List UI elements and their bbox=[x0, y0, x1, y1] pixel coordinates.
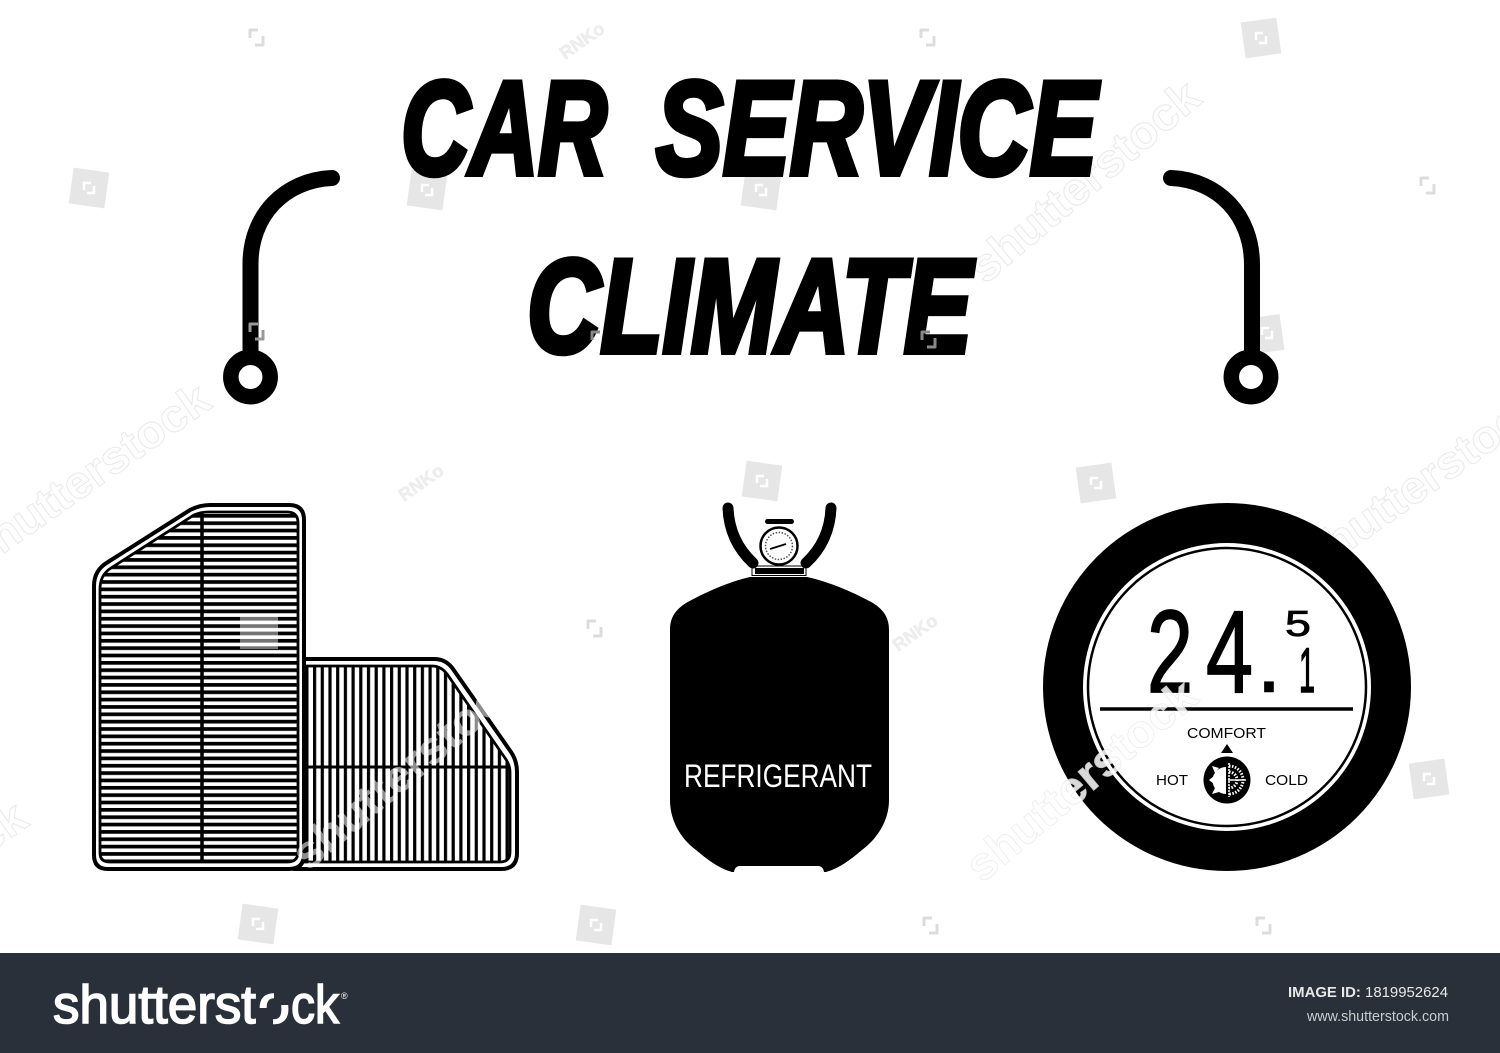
watermark text: shutterstock bbox=[958, 69, 1210, 293]
shutterstock logo: o bbox=[258, 975, 290, 1035]
website: www.shutterstock.com bbox=[1306, 1008, 1449, 1025]
cold label: COLD bbox=[1265, 773, 1308, 789]
valve base plate bbox=[755, 568, 804, 574]
hot label: HOT bbox=[1156, 773, 1188, 789]
icon: refrigerant tank bbox=[670, 508, 889, 872]
temperature readout: 4 bbox=[1206, 586, 1253, 717]
icon: sun and snowflake bbox=[1204, 756, 1250, 804]
tank body bbox=[670, 577, 889, 872]
icon: climate control dial: 1 bbox=[1299, 636, 1315, 706]
title word: car: CAR bbox=[401, 55, 607, 203]
left filter, horizontal pleats bbox=[94, 505, 304, 869]
left bracket bbox=[231, 178, 332, 397]
dial bezel bbox=[1043, 503, 1411, 871]
right filter, vertical pleats bbox=[295, 659, 517, 869]
watermark over filter: shutterstock bbox=[281, 656, 533, 880]
temperature readout: 5 bbox=[1285, 603, 1311, 644]
title bbox=[401, 55, 1100, 381]
footer bar bbox=[0, 953, 1500, 1053]
right bracket bbox=[1171, 178, 1271, 397]
watermark text: RNKo bbox=[889, 610, 941, 655]
temperature readout bbox=[1147, 586, 1315, 717]
gauge top bar bbox=[765, 519, 794, 524]
image id: IMAGE ID: 1819952624 bbox=[1288, 984, 1448, 1001]
pointer triangle bbox=[1221, 744, 1233, 753]
watermark text: RNKo bbox=[556, 18, 608, 63]
temperature readout: . bbox=[1260, 629, 1278, 707]
watermark tile on filter bbox=[240, 615, 278, 649]
divider bbox=[1100, 707, 1353, 711]
temperature readout: 2 bbox=[1147, 586, 1193, 717]
comfort label: COMFORT bbox=[1187, 726, 1266, 742]
watermark over dial: shutterstock bbox=[955, 668, 1207, 892]
pressure gauge bbox=[760, 528, 798, 564]
title word: service: SERVICE bbox=[656, 55, 1100, 203]
icon: cabin air filters bbox=[94, 505, 517, 869]
watermark text: RNKo bbox=[395, 460, 447, 505]
icon: climate control dial bbox=[1043, 503, 1411, 871]
tank handles bbox=[728, 508, 831, 563]
small watermark swirls bbox=[250, 30, 1434, 933]
shutterstock logo: ck bbox=[291, 975, 340, 1035]
registered mark: ® bbox=[341, 991, 348, 1001]
title line: climate: CLIMATE bbox=[527, 233, 975, 381]
shutterstock logo: shutterst bbox=[53, 975, 256, 1035]
tank label: REFRIGERANT bbox=[684, 758, 872, 794]
